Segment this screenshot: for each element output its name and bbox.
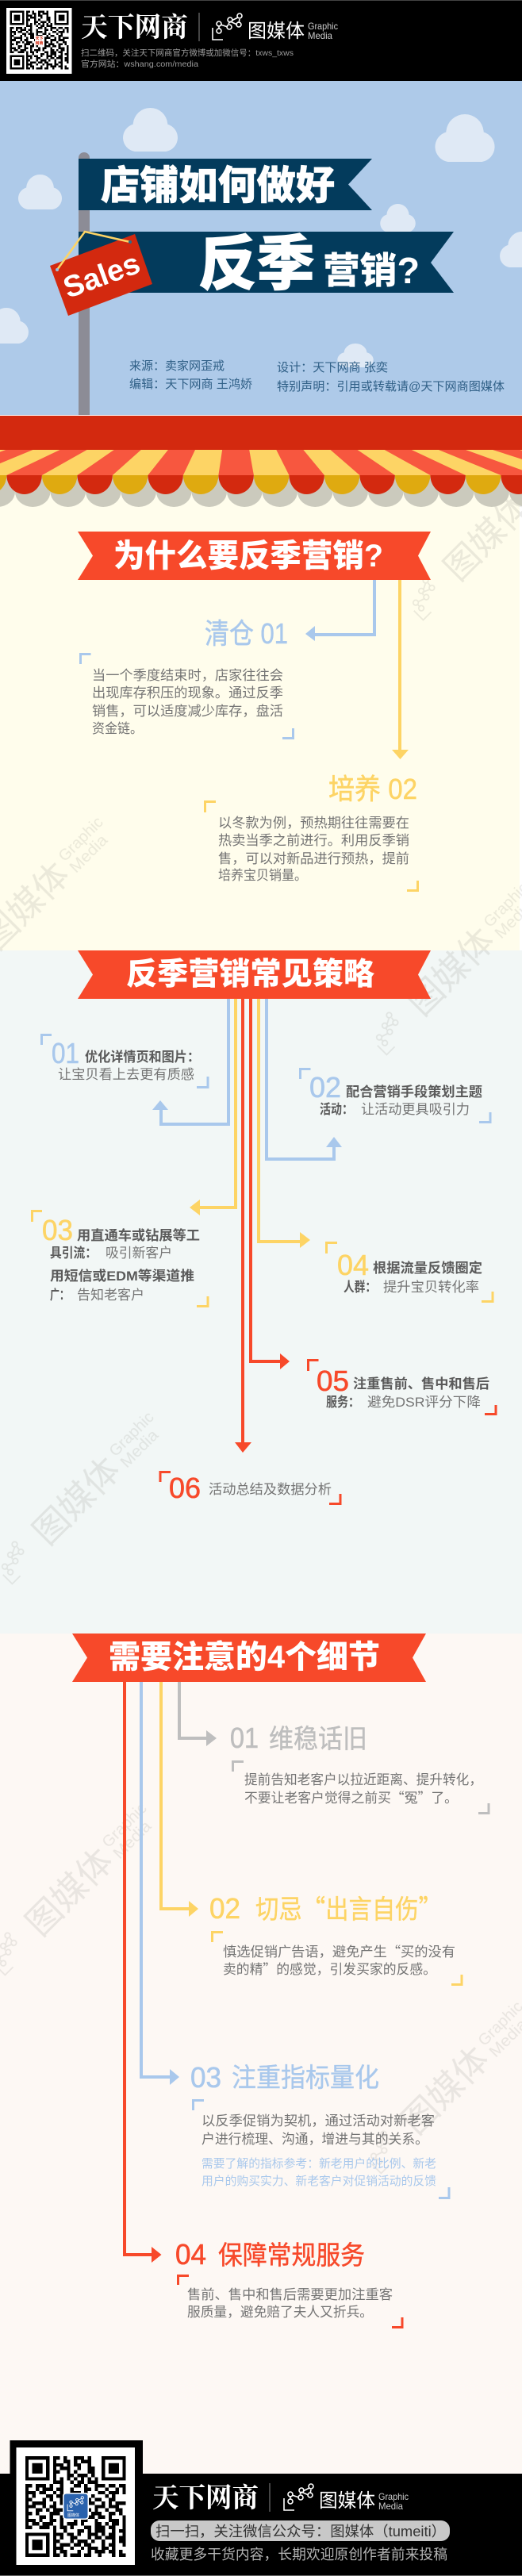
item: strategy 02: 活动： <box>320 1102 353 1117</box>
item: detail 03: 注重指标量化 <box>232 2063 379 2092</box>
item: 清仓 01: 销售，可以适度减少库存，盘活 <box>92 704 283 719</box>
item: strategy 01: 优化详情页和图片： <box>85 1049 200 1065</box>
credits: 设计：天下网商 张奕 <box>277 361 388 374</box>
item: detail 03: 以反季促销为契机，通过活动对新老客 <box>202 2113 435 2129</box>
item: detail 03: 03 <box>190 2061 221 2094</box>
watermarks: 图媒体 <box>19 1841 121 1944</box>
panel: four details <box>72 1634 489 2328</box>
header contact text: 扫二维码，关注天下网商官方微博或加微信号：txws_txws <box>81 48 294 58</box>
item: strategy 04: 提升宝贝转化率 <box>383 1280 479 1295</box>
watermarks: Media <box>110 1818 155 1863</box>
header logo: 图媒体 <box>248 21 305 42</box>
item: detail 02: 02 <box>209 1892 240 1925</box>
item: strategy 03: 用短信或EDM等渠道推 <box>50 1268 194 1284</box>
title banner bottom <box>79 231 454 298</box>
footer QR code: 图媒体 <box>67 2513 79 2518</box>
arrow: strategy 01 <box>152 999 228 1124</box>
credits: 来源：卖家网歪戒 <box>129 359 225 373</box>
item: 清仓 01: 出现库存积压的现象。通过反季 <box>92 685 283 701</box>
item: strategy 06: 06 <box>169 1472 201 1504</box>
item: strategy 03: 吸引新客户 <box>106 1246 172 1261</box>
item: detail 01: 不要让老客户觉得之前买“冤”了。 <box>244 1787 458 1806</box>
WeChat follow pill: 扫一扫，关注微信公众号：图媒体（tumeiti） <box>155 2524 446 2540</box>
item: strategy 03: 03 <box>42 1214 73 1246</box>
title banner bottom: 营销? <box>323 250 420 291</box>
footer logo: Graphic <box>378 2491 409 2502</box>
heading ribbon 3 <box>72 1634 426 1682</box>
item: 培养 02: 培养 02 <box>328 773 417 805</box>
footer logo: Media <box>378 2501 403 2512</box>
item: detail 01 <box>230 1722 489 1814</box>
heading ribbon 1 <box>78 532 431 580</box>
footer logo <box>152 2476 409 2515</box>
header logo: Media <box>308 30 332 41</box>
panel: sky hero <box>0 81 522 415</box>
panel: top header bar <box>0 0 522 81</box>
item: strategy 03: 告知老客户 <box>77 1288 144 1303</box>
footer logo: 图媒体 <box>319 2490 375 2512</box>
item: strategy 01 <box>41 1035 208 1087</box>
footer logo: 天下网商 <box>152 2476 259 2515</box>
item: strategy 03: 用直通车或钻展等工 <box>77 1227 200 1243</box>
item: 清仓 01: 清仓 01 <box>205 617 288 650</box>
item: strategy 05: 注重售前、售中和售后 <box>353 1376 489 1392</box>
item: strategy 04 <box>327 1242 493 1301</box>
item: detail 02: 慎选促销广告语，避免产生“买的没有 <box>223 1941 455 1960</box>
item: 清仓 01: 资金链。 <box>92 721 143 736</box>
item: strategy 03: 具引流： <box>50 1246 97 1261</box>
header contact text: 官方网站：wshang.com/media <box>81 59 198 69</box>
watermarks <box>0 443 522 2178</box>
arrow: detail 04 <box>125 1682 162 2263</box>
item: strategy 06 <box>160 1472 340 1504</box>
panel: section 1 background <box>0 468 520 950</box>
credits: 特别声明：引用或转载请@天下网商图媒体 <box>277 379 505 394</box>
panel: section 3 background <box>0 1634 522 2474</box>
arrow: strategy 06 <box>235 999 251 1453</box>
credits: 编辑：天下网商 王鸿娇 <box>129 378 252 391</box>
clouds <box>0 108 522 367</box>
item: detail 03: 户进行梳理、沟通，增进与其的关系。 <box>202 2132 428 2147</box>
item: strategy 05: 服务： <box>326 1395 359 1410</box>
arrow: detail 03 <box>141 1682 179 2085</box>
item: strategy 04: 04 <box>337 1249 369 1281</box>
heading ribbon 1: 为什么要反季营销? <box>113 539 383 574</box>
item: strategy 02: 02 <box>309 1071 341 1104</box>
item: 清仓 01 <box>81 617 294 738</box>
item: strategy 02: 配合营销手段策划主题 <box>346 1084 482 1100</box>
footer invitation text: 收藏更多干货内容，长期欢迎原创作者前来投稿 <box>151 2547 447 2563</box>
credits <box>129 359 505 394</box>
item: 培养 02: 培养宝贝销量。 <box>218 868 307 883</box>
arrow: strategy 02 <box>267 999 342 1159</box>
item: 培养 02 <box>205 773 417 890</box>
panel: section 2 background <box>0 950 522 1634</box>
item: strategy 01: 01 <box>52 1037 79 1069</box>
item: detail 02 <box>209 1888 462 1985</box>
watermarks: Graphic <box>56 814 107 866</box>
watermarks: Media <box>67 831 112 877</box>
arrow: detail 02 <box>161 1682 198 1917</box>
item: detail 02: 切忌“出言自伤” <box>255 1888 442 1926</box>
arrow: strategy 04 <box>259 999 310 1248</box>
item: detail 03: 需要了解的指标参考：新老用户的比例、新老 <box>202 2157 436 2171</box>
item: detail 04: 售前、售中和售后需要更加注重客 <box>187 2287 393 2302</box>
item: detail 04: 04 <box>175 2238 206 2271</box>
arrow: to 清仓 <box>305 580 374 641</box>
watermarks: 图媒体 <box>401 921 502 1023</box>
header QR code: 网商 <box>35 40 44 46</box>
heading ribbon 2: 反季营销常见策略 <box>126 958 374 992</box>
title banner top <box>79 159 372 210</box>
watermarks: Graphic <box>106 1409 158 1461</box>
header logo: Graphic <box>308 21 338 32</box>
item: 清仓 01: 当一个季度结束时，店家往往会 <box>92 668 283 683</box>
item: strategy 05 <box>308 1360 496 1414</box>
panel: common strategies <box>32 950 496 1504</box>
panel: why counter-season marketing <box>78 532 431 890</box>
watermarks: Graphic <box>99 1800 151 1852</box>
item: detail 04: 保障常规服务 <box>218 2240 365 2270</box>
item: detail 04 <box>175 2238 402 2328</box>
Sales tag <box>50 232 152 316</box>
arrow: to 培养 <box>392 580 409 759</box>
item: strategy 03: 广： <box>50 1288 69 1303</box>
item: detail 02: 卖的精”的感觉，引发买家的反感。 <box>223 1958 436 1978</box>
arrow: strategy 03 <box>190 999 236 1215</box>
sign pole <box>79 152 90 415</box>
item: detail 03: 用户的购买实力、新老客户对促销活动的反馈 <box>202 2175 436 2188</box>
item: strategy 05: 05 <box>317 1365 349 1397</box>
item: detail 01: 维稳话旧 <box>269 1724 367 1753</box>
watermarks: 图媒体 <box>395 2040 497 2142</box>
heading ribbon 2 <box>78 950 431 999</box>
header logo: 天下网商 <box>81 6 188 44</box>
heading ribbon 3: 需要注意的4个细节 <box>109 1639 380 1675</box>
watermarks: Media <box>117 1426 163 1472</box>
item: strategy 03 <box>32 1211 208 1306</box>
arrow: detail 01 <box>179 1682 217 1746</box>
item: strategy 02: 让活动更具吸引力 <box>361 1102 470 1117</box>
panel: footer <box>0 2440 522 2576</box>
item: strategy 02 <box>300 1069 490 1122</box>
title banner bottom: 反季 <box>198 231 315 298</box>
item: strategy 04: 根据流量反馈圈定 <box>373 1260 482 1276</box>
item: strategy 01: 让宝贝看上去更有质感 <box>58 1067 194 1082</box>
header QR code <box>6 8 71 74</box>
item: detail 01: 提前告知老客户以拉近距离、提升转化， <box>244 1772 482 1787</box>
header contact text <box>81 48 294 69</box>
item: 培养 02: 售，可以对新品进行预热，提前 <box>218 851 409 866</box>
item: strategy 04: 人群： <box>344 1279 376 1295</box>
title banner top: 店铺如何做好 <box>101 163 335 208</box>
header logo <box>81 6 338 44</box>
item: detail 03 <box>190 2061 449 2198</box>
item: detail 04: 服质量，避免赔了夫人又折兵。 <box>187 2305 373 2320</box>
item: strategy 05: 避免DSR评分下降 <box>367 1395 481 1410</box>
item: detail 01: 01 <box>230 1722 259 1754</box>
arrow: strategy 05 <box>251 999 290 1369</box>
item: 培养 02: 热卖当季之前进行。利用反季销 <box>218 833 409 848</box>
header QR code: 天下 <box>35 36 44 41</box>
watermarks: 图媒体 <box>26 1450 128 1553</box>
item: strategy 06: 活动总结及数据分析 <box>209 1482 332 1497</box>
awning <box>0 415 522 507</box>
item: 培养 02: 以冬款为例，预热期往往需要在 <box>218 816 409 831</box>
footer QR code <box>10 2440 143 2565</box>
Sales tag: Sales <box>59 247 144 305</box>
